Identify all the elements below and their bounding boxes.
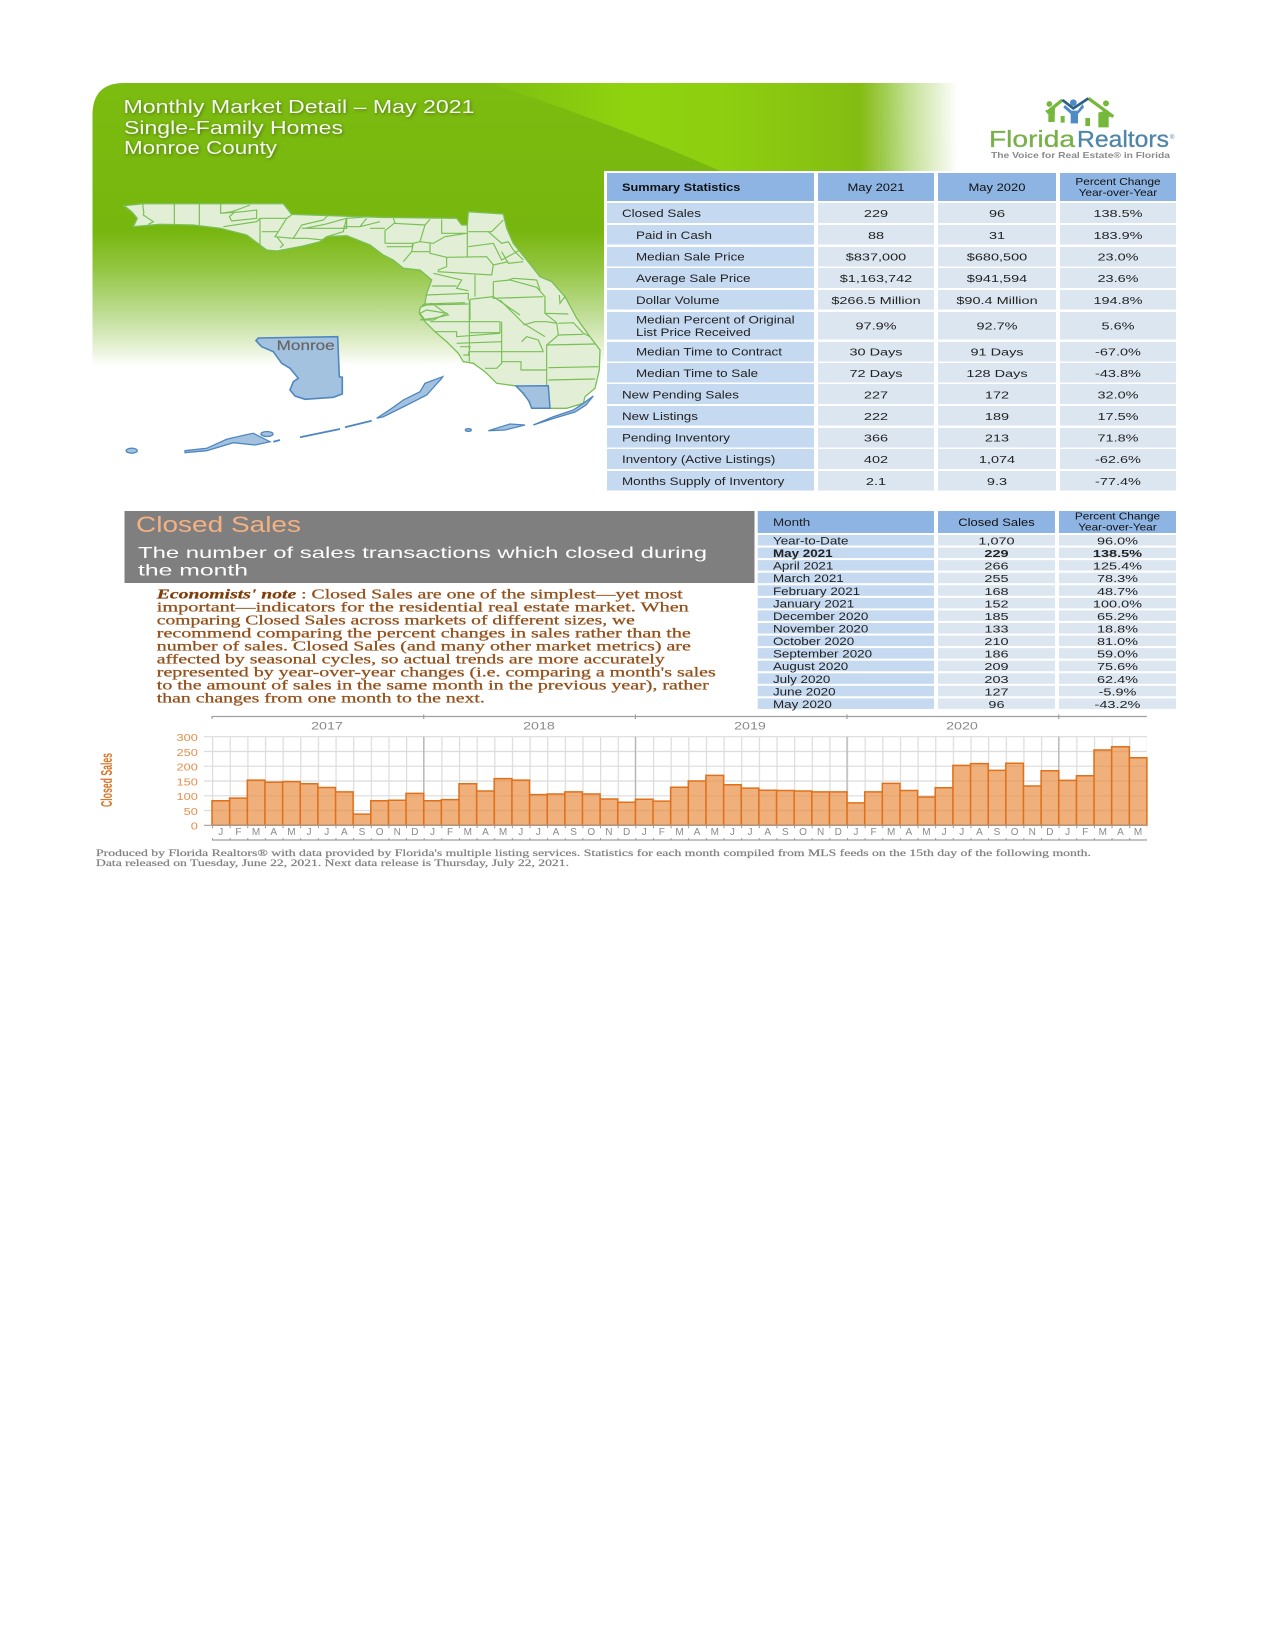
row: Median Percent of Original List Price Received: 92.7%	[976, 320, 1018, 332]
row: March 2021: 255	[984, 573, 1009, 585]
axis title: Closed Sales	[99, 753, 116, 807]
row: December 2020	[758, 610, 1176, 623]
row: Median Time to Sale: -43.8%	[1095, 368, 1141, 379]
row: Average Sale Price: 23.6%	[1097, 273, 1139, 284]
row: Pending Inventory	[607, 428, 1176, 448]
y axis labels: 0	[191, 821, 198, 832]
Florida Keys	[126, 377, 593, 453]
row: September 2020: September 2020	[773, 648, 872, 660]
row: Paid in Cash: 183.9%	[1093, 230, 1143, 241]
row: New Listings: 189	[985, 411, 1009, 422]
row: March 2021: 78.3%	[1097, 573, 1138, 585]
row: August 2020: 209	[984, 661, 1009, 673]
row: New Pending Sales: 172	[985, 389, 1009, 401]
row: Dollar Volume: Dollar Volume	[636, 294, 720, 307]
Monroe county, enlarged callout	[256, 337, 342, 399]
text block: economists' note	[155, 587, 716, 706]
logo: Florida Realtors: Florida	[989, 126, 1075, 152]
year axis: 2020	[946, 719, 978, 732]
row: October 2020: 81.0%	[1097, 636, 1138, 648]
county lines: north peninsula	[370, 218, 565, 320]
y axis labels: 300	[177, 732, 198, 744]
row: December 2020: December 2020	[773, 610, 869, 623]
footer note: Data released on Tuesday, June 22, 2021. Next data release is Thursday, July 22, 2021.	[96, 859, 569, 869]
row: September 2020: 186	[984, 648, 1009, 660]
table header: Year-over-Year	[1078, 522, 1157, 533]
table header: Percent Change	[1075, 177, 1161, 188]
footer note: Produced by Florida Realtors® with data provided by Florida's multiple listing services. Statistics for each month compiled from MLS feeds on the 15th day of the following month.	[96, 848, 1091, 859]
row: Paid in Cash	[607, 225, 1176, 244]
row: Dollar Volume: $90.4 Million	[956, 295, 1038, 306]
row: October 2020: October 2020	[773, 635, 854, 648]
title	[124, 96, 474, 158]
month axis: JFMAMJJASONDJFMAMJJASONDJFMAMJJASONDJFMAMJJASONDJFMAM	[218, 827, 1142, 838]
logo: Florida Realtors	[989, 98, 1175, 160]
text block: economists' note: Economists' note : Closed Sales are one of the simplest—yet most	[155, 587, 683, 602]
row: Median Time to Contract	[607, 342, 1176, 362]
row: Average Sale Price: $1,163,742	[840, 273, 912, 284]
row: New Pending Sales: 227	[864, 389, 888, 401]
row: Paid in Cash: Paid in Cash	[636, 229, 712, 242]
icon: houses with people	[1045, 98, 1113, 127]
heading: Closed Sales: Closed Sales	[136, 512, 301, 537]
row: April 2021: 266	[984, 560, 1009, 572]
row: Median Percent of Original List Price Received: 97.9%	[855, 320, 897, 332]
gridlines	[204, 737, 1147, 825]
title: Monroe County	[124, 137, 278, 158]
title: Monthly Market Detail – May 2021	[124, 96, 474, 117]
bar chart: closed sales by month	[99, 714, 1147, 840]
row: Dollar Volume: 194.8%	[1093, 295, 1143, 306]
table header	[607, 173, 1176, 201]
bars	[212, 747, 1147, 825]
row: November 2020: 133	[984, 623, 1009, 635]
text block: economists' note: important—indicators for the residential real estate market. When	[157, 600, 689, 615]
row: Paid in Cash: 31	[989, 230, 1005, 241]
row: April 2021: April 2021	[773, 560, 834, 572]
table header: Year-over-Year	[1079, 188, 1158, 199]
row: January 2021: January 2021	[773, 598, 854, 610]
county lines: panhandle	[143, 204, 380, 248]
text block: economists' note: number of sales. Closed Sales (and many other market metrics) are	[157, 639, 691, 654]
y axis labels: 100	[177, 791, 198, 803]
subheading	[138, 545, 707, 580]
panel: summary statistics table	[604, 171, 1180, 494]
row: May 2021: 229	[984, 548, 1009, 559]
y axis labels: 50	[184, 806, 198, 817]
row: Dollar Volume	[607, 290, 1176, 310]
text block: economists' note: represented by year-over-year changes (i.e. comparing a month's sales	[157, 665, 716, 680]
row: February 2021: 168	[984, 586, 1009, 597]
table header: Month	[773, 516, 810, 529]
logo: Florida Realtors: ®	[1170, 134, 1175, 141]
row: Inventory (Active Listings): Inventory (Active Listings)	[622, 453, 775, 466]
row: January 2021: 100.0%	[1093, 598, 1142, 610]
row: Closed Sales: 229	[864, 208, 888, 219]
y axis labels: 150	[177, 776, 198, 788]
row: July 2020: 62.4%	[1097, 674, 1138, 685]
y axis labels: 200	[177, 762, 198, 773]
table header	[758, 511, 1176, 533]
row: Closed Sales	[607, 203, 1176, 223]
row: Pending Inventory: 366	[864, 432, 888, 444]
row: Average Sale Price: $941,594	[967, 273, 1027, 284]
row: October 2020: 210	[984, 636, 1009, 648]
row: Median Time to Contract: Median Time to Contract	[636, 346, 783, 358]
row: Months Supply of Inventory: -77.4%	[1095, 476, 1141, 487]
year axis: 2018	[523, 719, 555, 732]
row: May 2020: 96	[988, 699, 1005, 710]
table header: Percent Change	[1075, 511, 1160, 522]
row: October 2020	[758, 635, 1176, 648]
row: Median Percent of Original List Price Received: List Price Received	[636, 326, 751, 339]
row: February 2021	[758, 585, 1176, 597]
row: April 2021: 125.4%	[1093, 560, 1142, 572]
year axis: 2019	[734, 719, 766, 732]
year axis: 2017	[311, 719, 343, 732]
row: June 2020: 127	[984, 686, 1009, 698]
row: January 2021	[758, 598, 1176, 610]
row: Median Time to Contract: 30 Days	[849, 346, 903, 358]
row: Months Supply of Inventory: 2.1	[866, 476, 886, 487]
subheading: The number of sales transactions which closed during	[138, 545, 707, 562]
row: Months Supply of Inventory: Months Supply of Inventory	[622, 475, 785, 488]
row: New Listings: New Listings	[622, 410, 698, 423]
row: Median Percent of Original List Price Received	[607, 312, 1176, 340]
row: Median Time to Contract: -67.0%	[1095, 346, 1141, 358]
row: July 2020	[758, 673, 1176, 685]
row: Median Time to Sale: 72 Days	[849, 368, 903, 379]
row: July 2020: July 2020	[773, 673, 831, 685]
row: Months Supply of Inventory	[607, 471, 1176, 490]
y axis labels: 250	[177, 747, 198, 758]
text block: economists' note: to the amount of sales in the same month in the previous year), rather	[157, 678, 710, 693]
year axis	[212, 714, 1147, 732]
row: New Pending Sales: 32.0%	[1097, 389, 1139, 401]
logo: Florida Realtors: The Voice for Real Estate® in Florida	[991, 150, 1170, 160]
row: New Listings: 222	[864, 411, 888, 422]
row: Average Sale Price	[607, 268, 1176, 288]
row: Pending Inventory: Pending Inventory	[622, 432, 731, 444]
table header: May 2020	[969, 181, 1026, 194]
row: August 2020	[758, 660, 1176, 673]
text block: economists' note: recommend comparing the percent changes in sales rather than the	[157, 626, 691, 641]
row: February 2021: February 2021	[773, 585, 860, 597]
row: Inventory (Active Listings): 402	[864, 454, 888, 465]
row: Median Sale Price	[607, 247, 1176, 266]
row: Inventory (Active Listings): 1,074	[979, 454, 1015, 465]
row: Pending Inventory: 213	[985, 432, 1009, 444]
text block: economists' note: than changes from one month to the next.	[157, 691, 485, 706]
row: December 2020: 65.2%	[1097, 611, 1138, 622]
row: Average Sale Price: Average Sale Price	[636, 272, 751, 285]
row: March 2021: March 2021	[773, 572, 844, 585]
state outline	[124, 204, 600, 408]
row: Median Percent of Original List Price Received: 5.6%	[1102, 320, 1134, 332]
row: June 2020: June 2020	[773, 685, 836, 698]
row: September 2020: 59.0%	[1097, 648, 1138, 660]
row: May 2020	[758, 698, 1176, 711]
row: August 2020: 75.6%	[1097, 661, 1138, 673]
row: May 2021	[758, 547, 1176, 560]
row: Median Sale Price: 23.0%	[1097, 251, 1139, 263]
row: Year-to-Date: 96.0%	[1097, 535, 1138, 547]
header banner	[92, 83, 1189, 368]
table header: Summary Statistics	[622, 181, 741, 194]
row: Median Time to Sale: 128 Days	[966, 368, 1028, 379]
row: Pending Inventory: 71.8%	[1097, 432, 1139, 444]
row: New Listings: 17.5%	[1097, 411, 1139, 422]
subheading: the month	[138, 562, 248, 580]
row: June 2020: -5.9%	[1099, 686, 1136, 698]
row: Closed Sales: Closed Sales	[622, 207, 701, 220]
row: Closed Sales: 96	[989, 208, 1005, 219]
row: May 2021: May 2021	[773, 547, 833, 560]
row: Inventory (Active Listings)	[607, 449, 1176, 469]
row: March 2021	[758, 572, 1176, 585]
row: Median Percent of Original List Price Received: Median Percent of Original	[636, 314, 795, 326]
logo: Florida Realtors: Realtors	[1077, 126, 1169, 152]
row: February 2021: 48.7%	[1097, 586, 1138, 597]
title: Single-Family Homes	[124, 117, 343, 138]
row: Months Supply of Inventory: 9.3	[987, 476, 1007, 487]
footer note	[96, 848, 1091, 869]
row: Paid in Cash: 88	[868, 230, 884, 241]
row: January 2021: 152	[984, 598, 1009, 610]
row: Closed Sales: 138.5%	[1093, 208, 1143, 219]
text block: economists' note: affected by seasonal cycles, so actual trends are more accurately	[157, 652, 665, 667]
row: August 2020: August 2020	[773, 660, 848, 673]
row: Year-to-Date: 1,070	[978, 535, 1015, 547]
row: Median Time to Sale	[607, 363, 1176, 382]
row: Median Time to Sale: Median Time to Sale	[636, 367, 758, 380]
row: Year-to-Date: Year-to-Date	[773, 535, 849, 547]
row: May 2020: May 2020	[773, 698, 832, 711]
row: Median Sale Price: $837,000	[846, 251, 906, 263]
table header: Closed Sales	[958, 516, 1035, 529]
Monroe county, mainland	[516, 386, 550, 408]
panel: closed sales monthly table	[758, 511, 1176, 711]
y axis labels	[177, 732, 198, 832]
row: Inventory (Active Listings): -62.6%	[1095, 454, 1141, 465]
row: Median Sale Price: $680,500	[967, 251, 1027, 263]
panel: Closed Sales heading	[124, 511, 754, 583]
row: November 2020: 18.8%	[1097, 623, 1138, 635]
row: December 2020: 185	[984, 611, 1009, 622]
row: New Pending Sales: New Pending Sales	[622, 389, 739, 401]
row: May 2021: 138.5%	[1093, 548, 1142, 559]
row: November 2020	[758, 623, 1176, 635]
row: July 2020: 203	[984, 674, 1009, 685]
row: New Pending Sales	[607, 384, 1176, 404]
table header: May 2021	[848, 181, 905, 194]
row: April 2021	[758, 560, 1176, 572]
row: November 2020: November 2020	[773, 623, 869, 635]
map of Florida	[124, 204, 600, 453]
county lines: south peninsula	[420, 300, 598, 407]
row: Median Time to Contract: 91 Days	[970, 346, 1024, 358]
row: Year-to-Date	[758, 535, 1176, 547]
row: June 2020	[758, 685, 1176, 698]
row: May 2020: -43.2%	[1095, 699, 1140, 710]
row: New Listings	[607, 406, 1176, 426]
label: Monroe: Monroe	[277, 337, 335, 353]
row: Dollar Volume: $266.5 Million	[831, 295, 921, 306]
row: September 2020	[758, 648, 1176, 660]
row: Median Sale Price: Median Sale Price	[636, 251, 745, 263]
text block: economists' note: comparing Closed Sales across markets of different sizes, we	[157, 613, 635, 628]
